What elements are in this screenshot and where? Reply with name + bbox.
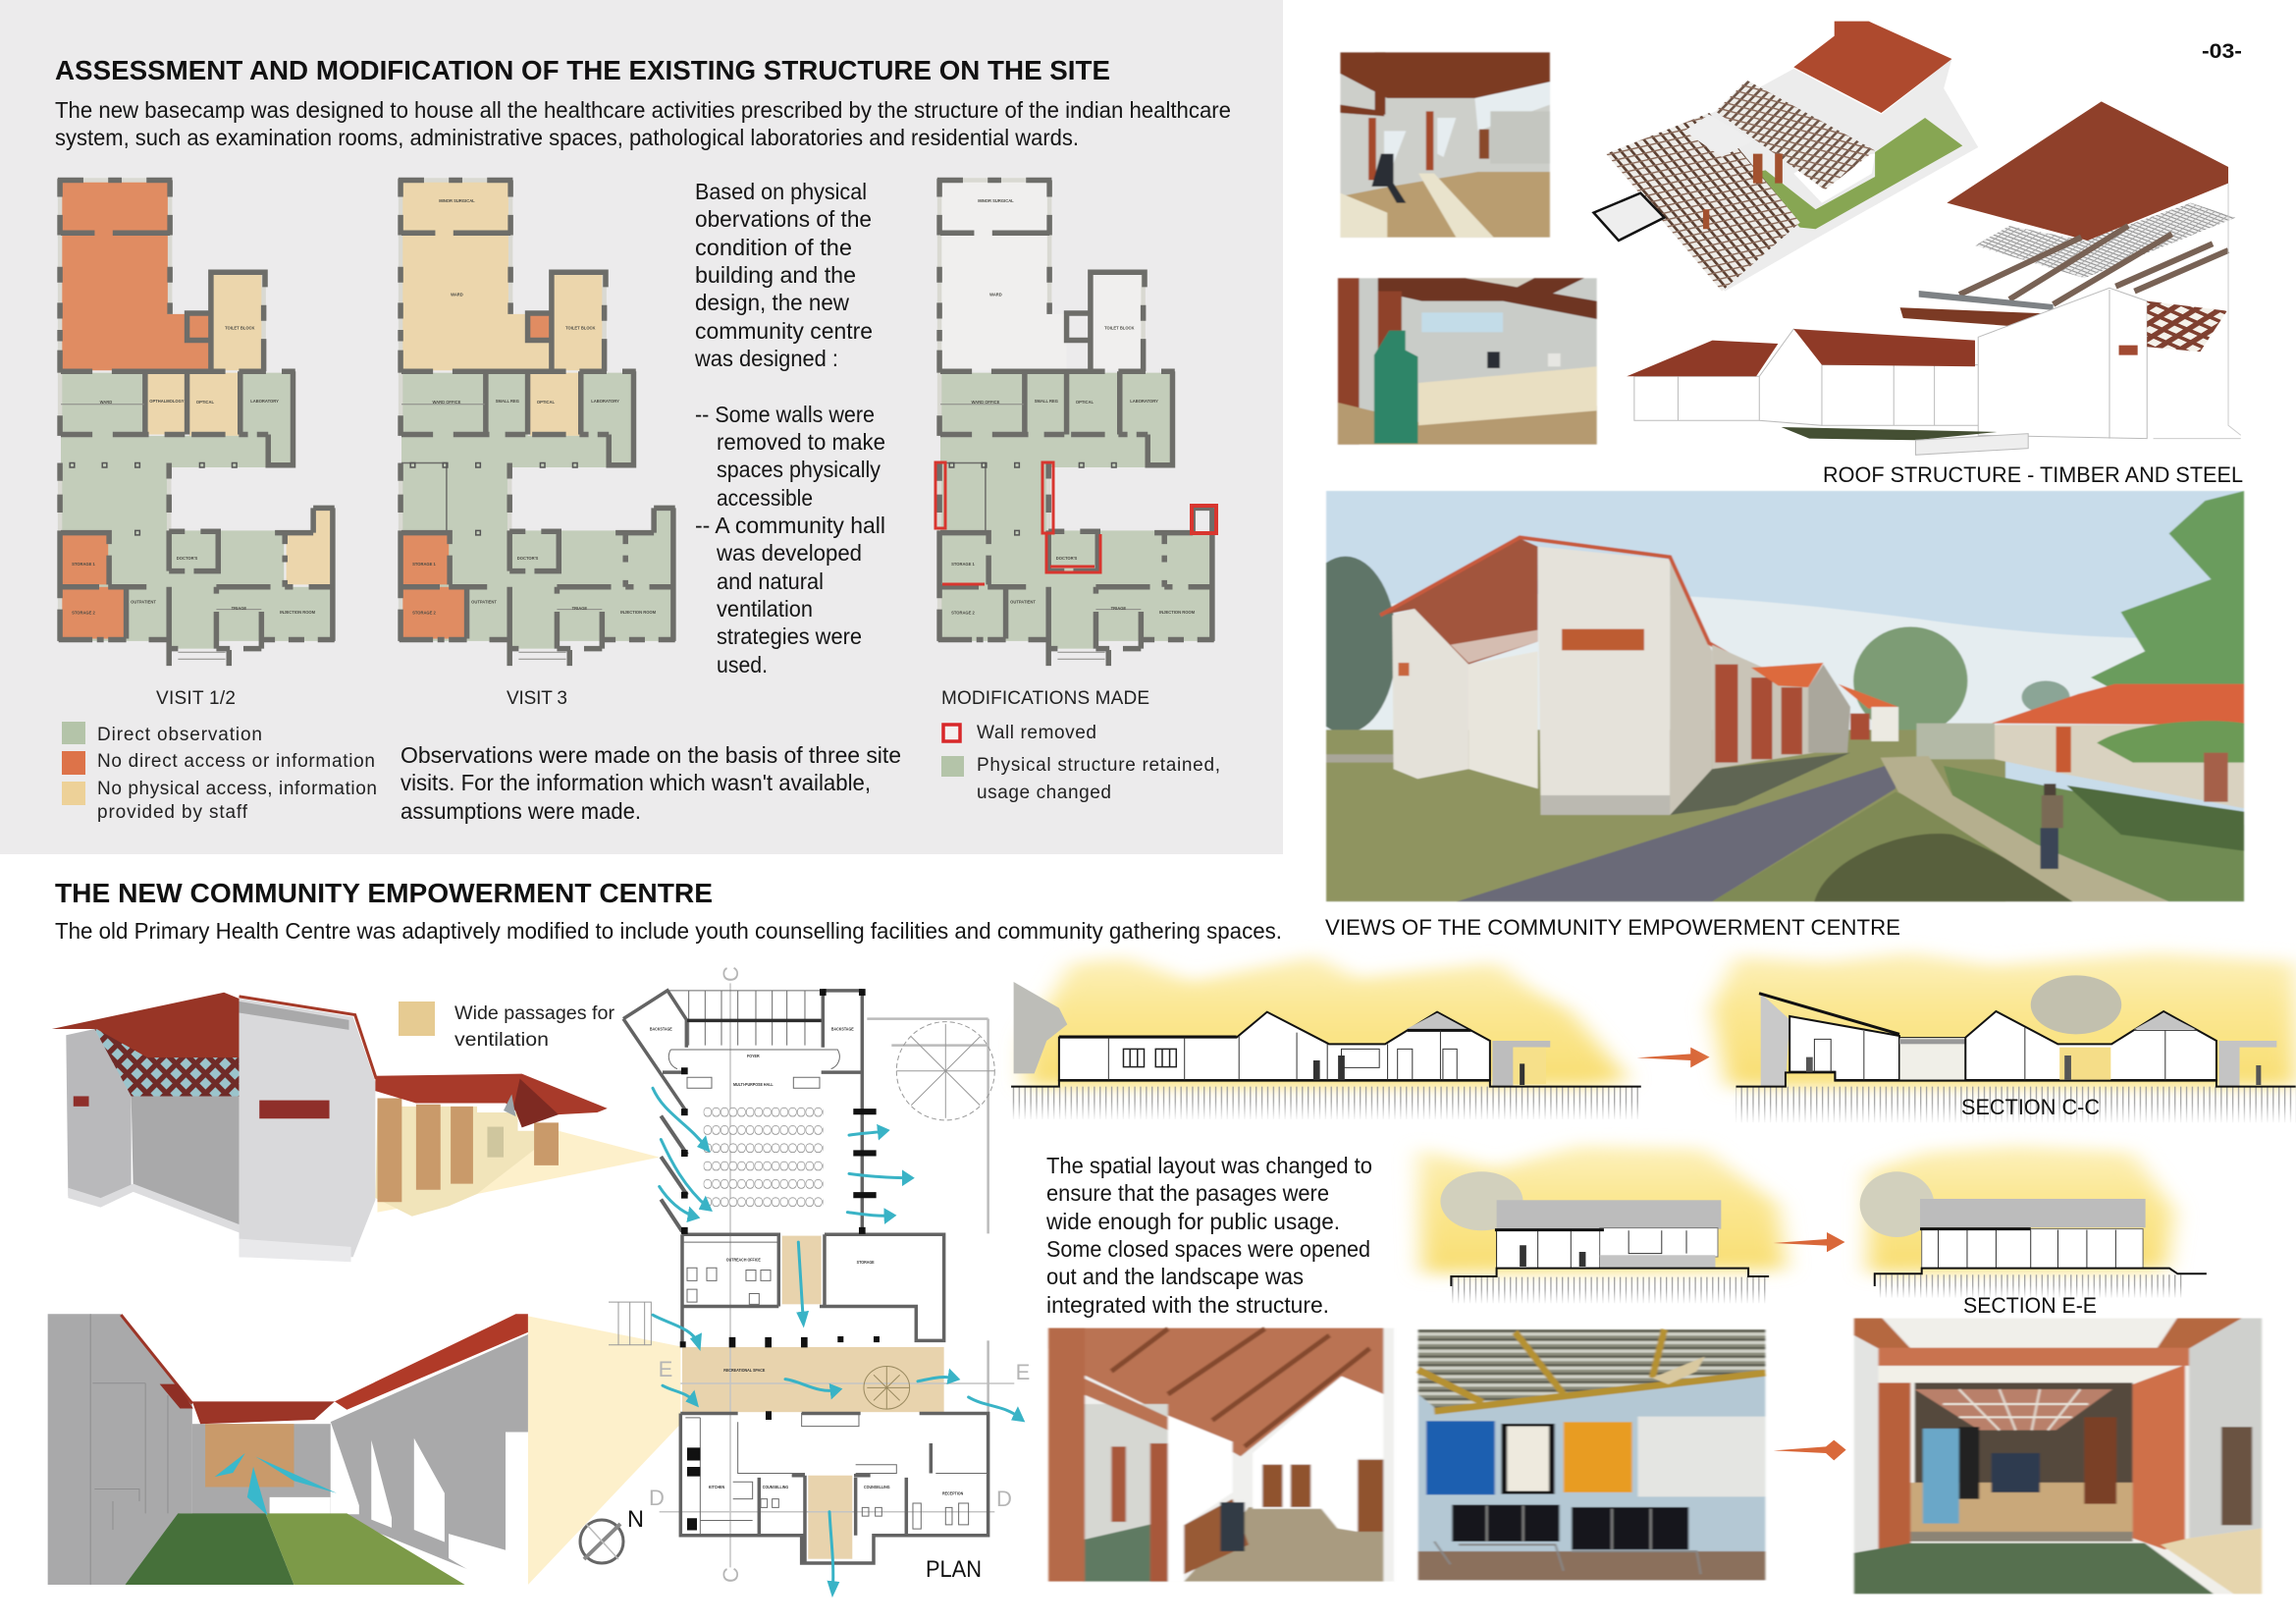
- section C-C: existing: [1009, 955, 1641, 1120]
- legend: modifications: Physical structure retained,: [977, 755, 1220, 776]
- floor plan: visit 3: [399, 179, 675, 666]
- section markers: [649, 966, 1030, 1583]
- floor plan: visit 3: INJECTION ROOM: [620, 610, 657, 615]
- text block: spatial layout: integrated with the structure.: [1046, 1292, 1329, 1318]
- text block: spatial layout: ensure that the pasages were: [1046, 1180, 1329, 1206]
- axonometric: roof framing from above: [1593, 22, 1978, 292]
- legend: visit observation types: [62, 722, 377, 823]
- floor plan: modifications made: MINOR SURGICAL: [978, 198, 1014, 203]
- caption: views of the centre: VIEWS OF THE COMMUNITY EMPOWERMENT CENTRE: [1325, 915, 1900, 940]
- floor plan: visit 1/2: OUTPATIENT: [131, 600, 156, 605]
- floor plan: proposed community centre: COUNSELLING: [864, 1484, 890, 1489]
- floor plan: modifications made: [935, 179, 1216, 666]
- section markers: E: [1016, 1360, 1030, 1384]
- floor plan: proposed community centre: FOYER: [747, 1053, 760, 1058]
- photo: existing waiting room: [1418, 1329, 1765, 1580]
- arrow: section C-C transformation: [1637, 1048, 1710, 1067]
- text block: observations: Observations were made on the basis of three site: [400, 742, 901, 768]
- exploded axonometric: timber and steel roof structure: [1627, 101, 2241, 455]
- legend: visit observation types: No physical access, information: [97, 779, 377, 799]
- text block: design explanation: removed to make: [717, 429, 885, 455]
- floor plan: modifications made: DOCTOR'S: [1056, 556, 1078, 561]
- floor plan: proposed community centre: COUNSELLING: [763, 1484, 789, 1489]
- floor plan: visit 3: TRIAGE: [572, 606, 587, 611]
- floor plan: visit 3: OUTPATIENT: [471, 600, 497, 605]
- text block: design explanation: -- Some walls were: [695, 402, 875, 427]
- floor plan: modifications made: WARD: [989, 293, 1002, 298]
- legend: modifications: usage changed: [977, 783, 1111, 803]
- floor plan: visit 3: TOILET BLOCK: [565, 326, 596, 331]
- floor plan: visit 1/2: OPTICAL: [196, 400, 214, 405]
- floor plan: modifications made: SMALL REG: [1035, 399, 1058, 404]
- legend: wide passages: Wide passages for: [454, 1003, 615, 1024]
- text block: spatial layout: out and the landscape was: [1046, 1264, 1304, 1289]
- interior render: hall with bench seating: [1340, 52, 1550, 238]
- section markers: D: [649, 1486, 665, 1510]
- text block: assessment intro: system, such as examination rooms, administrative spaces, pathological laboratories and residential wards.: [55, 125, 1079, 150]
- floor plan: visit 3: STORAGE 1: [412, 562, 437, 567]
- floor plan: visit 1/2: TRIAGE: [232, 606, 246, 611]
- floor plan: visit 3: WARD OFFICE: [432, 400, 461, 405]
- floor plan: modifications made: OPTICAL: [1076, 400, 1094, 405]
- floor plan: visit 1/2: DOCTOR'S: [177, 556, 198, 561]
- page number: -03-: [2202, 40, 2242, 63]
- floor plan: visit 1/2: STORAGE 2: [72, 610, 96, 615]
- floor plan: proposed community centre: [609, 983, 1021, 1591]
- floor plan: modifications made: STORAGE 1: [951, 562, 976, 567]
- text block: design explanation: Based on physical: [695, 179, 867, 204]
- floor plan: proposed community centre: OUTREACH OFFICE: [726, 1257, 761, 1263]
- floor plan: modifications made: STORAGE 2: [951, 610, 976, 615]
- text block: spatial layout: The spatial layout was changed to: [1046, 1153, 1372, 1178]
- text block: observations: visits. For the information which wasn't available,: [400, 770, 871, 795]
- text block: design explanation: [694, 179, 885, 677]
- section C-C: proposed: [1711, 952, 2296, 1123]
- text block: design explanation: condition of the: [695, 235, 852, 260]
- floor plan: visit 3: WARD: [451, 293, 463, 298]
- illustration: courtyard perspective: [48, 1314, 680, 1585]
- floor plan: visit 3: MINOR SURGICAL: [439, 198, 475, 203]
- caption: section E-E: SECTION E-E: [1963, 1293, 2097, 1318]
- text block: centre intro: The old Primary Health Centre was adaptively modified to include youth counselling facilities and community gathering spaces.: [55, 918, 1282, 944]
- floor plan: modifications made: TRIAGE: [1111, 606, 1126, 611]
- floor plan: visit 1/2: TOILET BLOCK: [225, 326, 255, 331]
- plan caption: modifications made: MODIFICATIONS MADE: [941, 688, 1149, 709]
- text block: design explanation: community centre: [695, 318, 873, 344]
- legend: visit observation types: provided by staff: [97, 802, 248, 823]
- text block: design explanation: was designed :: [694, 346, 838, 371]
- illustration: exterior with lattice gable: [52, 993, 660, 1262]
- floor plan: proposed community centre: KITCHEN: [709, 1484, 724, 1489]
- heading: new community empowerment centre: THE NEW COMMUNITY EMPOWERMENT CENTRE: [55, 878, 713, 908]
- legend: wide passages: ventilation: [454, 1030, 549, 1051]
- legend: modifications: Wall removed: [977, 723, 1096, 743]
- text block: design explanation: design, the new: [695, 290, 849, 315]
- compass: north: [580, 1506, 644, 1563]
- floor plan: modifications made: OUTPATIENT: [1010, 600, 1036, 605]
- floor plan: visit 1/2: WARD: [100, 400, 112, 405]
- floor plan: visit 1/2: [58, 179, 335, 666]
- text block: observations: [400, 742, 901, 824]
- interior render: gabled passage: [1048, 1328, 1394, 1582]
- floor plan: proposed community centre: RECEPTION: [942, 1490, 963, 1495]
- section markers: C: [719, 1567, 743, 1583]
- floor plan: visit 1/2: OPTHALMOLOGY: [149, 399, 185, 404]
- floor plan: modifications made: LABORATORY: [1130, 399, 1158, 404]
- text block: design explanation: building and the: [695, 262, 856, 288]
- text block: design explanation: and natural: [717, 568, 824, 594]
- text block: design explanation: obervations of the: [695, 206, 872, 232]
- section markers: C: [719, 966, 743, 982]
- section markers: E: [659, 1357, 672, 1381]
- floor plan: visit 3: SMALL REG: [496, 399, 519, 404]
- text block: design explanation: ventilation: [717, 596, 813, 622]
- caption: section C-C: SECTION C-C: [1961, 1095, 2100, 1119]
- plan caption: visit 1/2: VISIT 1/2: [156, 688, 236, 709]
- caption: plan: PLAN: [926, 1556, 982, 1583]
- arrow: photo to proposed: [1774, 1440, 1846, 1460]
- legend: modifications: [941, 723, 1220, 803]
- floor plan: visit 1/2: INJECTION ROOM: [280, 610, 316, 615]
- text block: design explanation: used.: [717, 652, 768, 677]
- floor plan: visit 1/2: LABORATORY: [250, 399, 279, 404]
- floor plan: proposed community centre: MULTI-PURPOSE HALL: [733, 1082, 774, 1087]
- floor plan: proposed community centre: RECREATIONAL SPACE: [723, 1367, 765, 1373]
- heading: assessment: ASSESSMENT AND MODIFICATION OF THE EXISTING STRUCTURE ON THE SITE: [55, 55, 1110, 85]
- floor plan: proposed community centre: BACKSTAGE: [650, 1026, 672, 1031]
- text block: design explanation: strategies were: [717, 623, 862, 649]
- text block: assessment intro: The new basecamp was designed to house all the healthcare activities prescribed by the structure of the indian healthcare: [55, 97, 1231, 123]
- section markers: D: [996, 1487, 1012, 1511]
- text block: design explanation: -- A community hall: [695, 513, 885, 538]
- floor plan: visit 3: DOCTOR'S: [517, 556, 539, 561]
- floor plan: proposed community centre: BACKSTAGE: [831, 1026, 854, 1031]
- text block: design explanation: accessible: [717, 485, 813, 511]
- section E-E: existing: [1418, 1146, 1786, 1304]
- text block: design explanation: spaces physically: [717, 457, 881, 482]
- caption: roof structure: ROOF STRUCTURE - TIMBER AND STEEL: [1823, 462, 2243, 487]
- interior render: proposed open passage: [1854, 1319, 2262, 1594]
- text block: spatial layout: Some closed spaces were opened: [1046, 1236, 1370, 1262]
- text block: spatial layout: wide enough for public usage.: [1045, 1209, 1340, 1234]
- text block: design explanation: was developed: [716, 540, 862, 566]
- main render: exterior view of the centre: [1295, 491, 2244, 901]
- floor plan: visit 1/2: STORAGE 1: [72, 562, 96, 567]
- legend: visit observation types: No direct access or information: [97, 751, 375, 772]
- legend: visit observation types: Direct observation: [97, 725, 262, 745]
- floor plan: visit 3: STORAGE 2: [412, 610, 437, 615]
- floor plan: modifications made: INJECTION ROOM: [1159, 610, 1196, 615]
- text block: observations: assumptions were made.: [400, 798, 641, 824]
- removed walls: red outlines: [935, 462, 1216, 584]
- floor plan: visit 3: OPTICAL: [537, 400, 555, 405]
- interior render: hall with woman in saree: [1338, 278, 1597, 445]
- floor plan: modifications made: TOILET BLOCK: [1104, 326, 1135, 331]
- floor plan: modifications made: WARD OFFICE: [971, 400, 1000, 405]
- plan caption: visit 3: VISIT 3: [507, 688, 567, 709]
- legend: wide passages: [399, 1001, 615, 1051]
- arrow: section E-E transformation: [1773, 1232, 1845, 1252]
- floor plan: proposed community centre: STORAGE: [857, 1259, 875, 1265]
- text block: spatial layout: [1045, 1153, 1372, 1318]
- compass: north: N: [627, 1506, 644, 1533]
- floor plan: visit 3: LABORATORY: [591, 399, 619, 404]
- text block: assessment intro: [55, 97, 1231, 150]
- panel: assessment background: [0, 0, 1283, 854]
- section E-E: proposed: [1860, 1146, 2207, 1298]
